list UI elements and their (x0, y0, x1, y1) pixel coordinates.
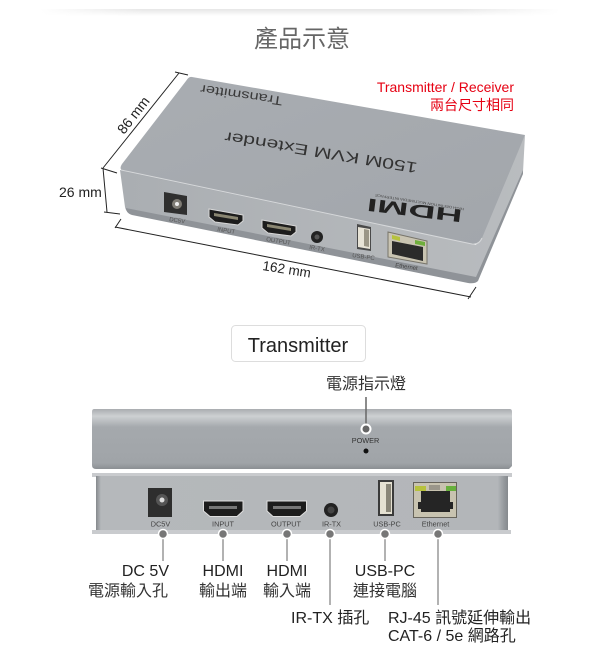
dimension: 26 mm: 26 mm (59, 184, 102, 200)
port: USB-PC (352, 224, 376, 262)
label: RJ-45 (388, 609, 531, 645)
callout line: HDMI output (218, 530, 228, 561)
red note: same size (377, 79, 514, 113)
port: USB-PC: USB-PC (352, 253, 376, 262)
port: Ethernet (388, 232, 427, 272)
port: IR-TX (309, 231, 325, 253)
dimension: 162 mm (115, 219, 476, 299)
device front face (120, 135, 525, 282)
power LED (364, 448, 368, 454)
port: INPUT: INPUT (212, 520, 234, 528)
port: Ethernet: Ethernet (422, 520, 449, 528)
callout line: RJ-45 (434, 530, 442, 605)
port: INPUT (204, 501, 243, 528)
port: OUTPUT (262, 220, 296, 247)
label: DC 5V: 電源輸入孔 (88, 582, 168, 600)
label: HDMI output (199, 563, 247, 600)
label: IR-TX: IR-TX 插孔 (291, 609, 369, 627)
port: DC5V: DC5V (151, 520, 170, 528)
printed label: 150M KVM Extender: 150M KVM Extender (223, 128, 419, 176)
top shadow band (40, 9, 560, 16)
label: RJ-45: CAT-6 / 5e 網路孔 (388, 627, 516, 645)
dimension: 162 mm: 162 mm (262, 258, 312, 281)
port: DC5V (148, 488, 172, 528)
port: IR-TX: IR-TX (322, 520, 341, 528)
label: HDMI input: 輸入端 (263, 582, 311, 600)
printed logo: HDMI: HDMI (366, 194, 463, 226)
callout line: power (362, 397, 370, 434)
heading box: Transmitter: Transmitter (248, 335, 349, 357)
port: DC5V: DC5V (169, 217, 185, 225)
panel: front of transmitter (92, 409, 512, 469)
label: power indicator: 電源指示燈 (326, 375, 406, 393)
port: Ethernet (414, 482, 456, 528)
device top face (121, 77, 525, 244)
port: USB-PC: USB-PC (373, 520, 401, 528)
device bottom lip (126, 170, 523, 283)
label: DC 5V (88, 563, 169, 600)
label: USB-PC (353, 563, 417, 600)
port: DC5V (164, 192, 187, 225)
red note: same size: 兩台尺寸相同 (430, 97, 514, 113)
product photo: device in perspective (120, 77, 525, 283)
port: Ethernet: Ethernet (395, 263, 418, 272)
power label: POWER (352, 436, 379, 445)
printed logo tagline: HIGH DEFINITION MULTIMEDIA INTERFACE (374, 193, 464, 211)
port: IR-TX: IR-TX (309, 245, 325, 253)
label: USB-PC: 連接電腦 (353, 582, 417, 600)
port: OUTPUT: OUTPUT (271, 520, 302, 528)
label: HDMI output: 輸出端 (199, 582, 247, 600)
label: HDMI output: HDMI (203, 563, 243, 580)
port: IR-TX (322, 503, 341, 528)
port: OUTPUT: OUTPUT (266, 237, 291, 247)
dimension: 26 mm (59, 168, 120, 214)
label: DC 5V: DC 5V (122, 563, 169, 580)
callout line: IR-TX (326, 530, 334, 605)
title: 產品示意 (254, 26, 350, 53)
label: HDMI input: HDMI (267, 563, 307, 580)
label: RJ-45: RJ-45 訊號延伸輸出 (388, 609, 531, 627)
heading box: Transmitter (232, 326, 366, 362)
callout line: USB-PC (380, 530, 390, 561)
panel: back of transmitter (92, 473, 512, 534)
red note: same size: Transmitter / Receiver (377, 79, 514, 95)
dimension: 86 mm: 86 mm (114, 93, 153, 137)
port: OUTPUT (267, 501, 306, 528)
label: USB-PC: USB-PC (355, 563, 415, 580)
callout line: DC 5V (158, 530, 168, 561)
port: INPUT: INPUT (217, 227, 236, 236)
label: HDMI input (263, 563, 311, 600)
dimension: 86 mm (103, 72, 188, 168)
printed label: Transmitter: Transmitter (199, 82, 283, 108)
port: USB-PC (373, 480, 401, 528)
callout line: HDMI input (282, 530, 292, 561)
top face front highlight (121, 170, 482, 244)
port: INPUT (209, 209, 243, 236)
